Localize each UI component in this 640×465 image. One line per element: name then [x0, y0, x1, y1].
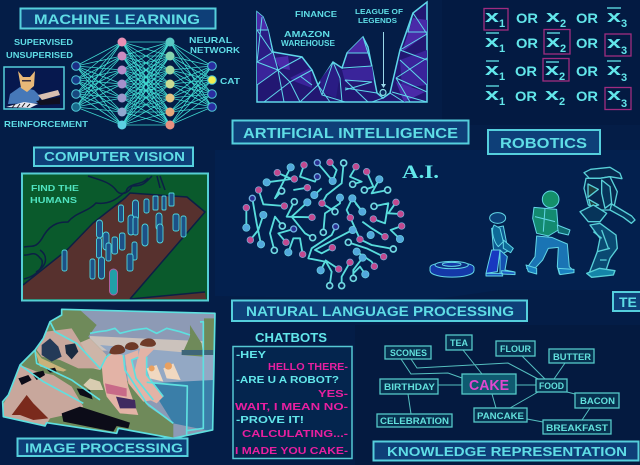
node: pancake: PANCAKE: [477, 411, 524, 422]
node: birthday: BIRTHDAY: [384, 382, 436, 393]
panel: chat transcript: -ARE U A ROBOT?: [236, 374, 339, 386]
node: pancake: [474, 408, 527, 422]
icon: medium humanoid robot: [526, 191, 574, 275]
panel: chat transcript: HELLO THERE-: [268, 362, 348, 373]
row 1: x: [485, 7, 500, 26]
node: bacon: BACON: [580, 396, 615, 407]
row 3: OR: [515, 63, 537, 79]
labels: landscape: LEGENDS: [358, 16, 397, 25]
heading: image processing: IMAGE PROCESSING: [25, 440, 183, 456]
node: birthday: [380, 379, 438, 394]
panel: chat transcript: -HEY: [236, 350, 266, 361]
heading: artificial intelligence: [232, 120, 468, 144]
chart: neural network: [72, 38, 216, 130]
icon: small humanoid robot: [486, 213, 515, 276]
node: butter: [549, 349, 594, 363]
row 4: OR: [515, 88, 537, 104]
image: layered painting: [2, 308, 216, 438]
row 2: OR: [576, 35, 598, 51]
labels: landscape: [281, 7, 403, 48]
row 2: 1: [499, 43, 505, 55]
row 3: x: [485, 60, 500, 79]
labels: landscape: WAREHOUSE: [281, 39, 336, 48]
row 3: 3: [621, 72, 627, 84]
row 1: OR: [516, 10, 538, 26]
label: A.I.: A.I.: [402, 162, 439, 183]
row 1: 2: [560, 18, 566, 30]
row 1: x: [607, 7, 622, 26]
row 3: 1: [499, 71, 505, 83]
row 2: x: [546, 32, 561, 51]
node: cake: CAKE: [469, 377, 509, 394]
row 4: [485, 85, 631, 110]
node: tea: TEA: [450, 338, 468, 349]
heading: artificial intelligence: ARTIFICIAL INTELLIGENCE: [243, 126, 458, 142]
node: bacon: [575, 393, 619, 408]
row 3: 2: [559, 71, 565, 83]
node: breakfast: [543, 420, 611, 434]
icon: circuit brain: [243, 159, 405, 289]
row 2: [485, 30, 631, 57]
panel: chat transcript: YES-: [318, 389, 348, 400]
row 3: OR: [576, 63, 598, 79]
labels: neural network output: CAT: [220, 76, 241, 86]
panel: image processing: [0, 300, 220, 456]
row 2: 3: [621, 45, 627, 57]
node: flour: FLOUR: [500, 344, 531, 355]
panel: chat transcript: I MADE YOU CAKE-: [235, 445, 349, 457]
panel: chat transcript: CALCULATING...-: [242, 429, 348, 440]
labels: learning types: SUPERVISED: [14, 37, 73, 47]
heading: robotics: [488, 130, 600, 154]
icon: robot vacuum: [430, 261, 474, 277]
panel: computer vision: [22, 148, 208, 300]
heading: computer vision: [34, 148, 193, 166]
heading: robotics: ROBOTICS: [500, 135, 587, 152]
node: breakfast: BREAKFAST: [546, 423, 608, 434]
row 1: 3: [621, 18, 627, 30]
row 2: 2: [560, 43, 566, 55]
arrow: to league of legends minimum: [380, 32, 386, 96]
row 2: x: [607, 33, 622, 52]
node: butter: BUTTER: [553, 352, 591, 363]
row 4: 2: [559, 96, 565, 108]
labels: landscape: AMAZON: [284, 29, 330, 39]
panel: chat transcript: -PROVE IT!: [236, 414, 304, 426]
row 3: [485, 58, 627, 84]
panel: robots: [430, 167, 635, 277]
labels: learning types: [4, 37, 89, 129]
labels: neural network output: [189, 35, 241, 86]
panel: machine learning: [4, 8, 241, 130]
image: find the humans: [22, 174, 208, 300]
heading: computer vision: COMPUTER VISION: [44, 150, 185, 164]
icon: cat playing keyboard: [4, 67, 64, 109]
chart: triangulated mountains: [257, 2, 427, 102]
row 1: 1: [499, 18, 505, 30]
heading: image processing: [18, 438, 188, 456]
panel: knowledge representation: [374, 335, 638, 460]
diagram: concept links: [401, 350, 590, 422]
panel: chat transcript: [233, 346, 352, 458]
node: cake: [462, 374, 516, 394]
labels: landscape: LEAGUE OF: [355, 7, 403, 16]
panel: natural language processing: [232, 300, 527, 458]
row 1: OR: [576, 10, 598, 26]
heading: natural language processing: [232, 300, 527, 321]
row 3: x: [545, 60, 560, 79]
node: tea: [446, 335, 472, 350]
node: celebration: CELEBRATION: [380, 416, 449, 427]
heading: machine learning: MACHINE LEARNING: [34, 11, 200, 27]
node: flour: [496, 341, 535, 356]
row 4: OR: [576, 88, 598, 104]
panel: logic satisfiability: [484, 7, 631, 110]
labels: neural network output: NEURAL: [189, 35, 232, 45]
labels: learning types: REINFORCEMENT: [4, 119, 89, 129]
heading: natural language processing: NATURAL LANGUAGE PROCESSING: [246, 304, 514, 319]
labels: landscape: FINANCE: [295, 10, 338, 19]
heading: knowledge representation: [374, 442, 638, 460]
row 4: 3: [621, 98, 627, 110]
node: scones: SCONES: [390, 348, 427, 359]
labels: neural network output: NETWORK: [190, 45, 241, 55]
row 4: x: [545, 85, 560, 104]
heading: chatbots: CHATBOTS: [255, 331, 327, 345]
row 1: x: [546, 7, 561, 26]
icon: tall mech robot: [580, 167, 635, 277]
image: find the humans: FIND THE: [31, 183, 79, 193]
row 4: x: [607, 85, 622, 104]
row 1: [484, 7, 627, 30]
labels: learning types: UNSUPERISED: [6, 50, 73, 60]
row 3: x: [607, 60, 622, 79]
node: food: FOOD: [539, 381, 564, 392]
panel: optimization landscape: [257, 2, 427, 102]
panel: chat transcript: WAIT, I MEAN NO-: [235, 402, 348, 413]
row 4: 1: [499, 96, 505, 108]
panel: AI brain: [243, 159, 439, 289]
row 4: x: [485, 85, 500, 104]
heading: knowledge representation: KNOWLEDGE REPRESENTATION: [387, 444, 627, 459]
heading: te (cropped): [613, 292, 640, 311]
row 2: OR: [516, 35, 538, 51]
heading: machine learning: [20, 8, 216, 28]
image: find the humans: HUMANS: [30, 195, 77, 205]
row 2: x: [485, 32, 500, 51]
heading: te (cropped): TE: [619, 294, 637, 310]
